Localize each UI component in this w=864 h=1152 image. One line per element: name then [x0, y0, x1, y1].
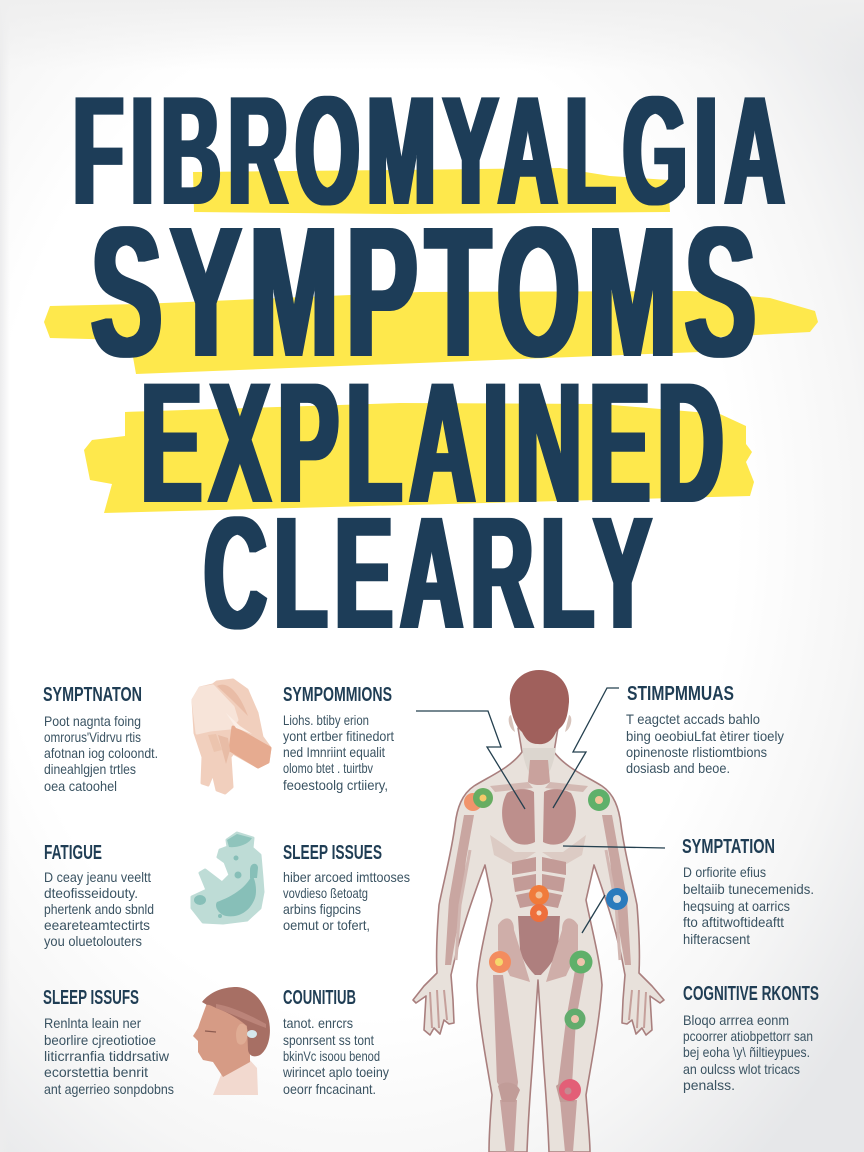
text block: cognitive rkonts — [683, 983, 819, 1093]
title — [73, 64, 792, 662]
body text: sponrsent ss tont — [283, 1033, 374, 1048]
body text: olomo btet . tuirtbv — [283, 761, 373, 776]
pain point: upper abdomen — [529, 885, 549, 905]
body text: penalss. — [683, 1078, 735, 1093]
chest muscles — [502, 789, 576, 845]
icon: teal curled figure — [192, 833, 263, 923]
body text — [626, 712, 784, 776]
body text: pcoorrer atiobpettorr san — [683, 1029, 813, 1044]
body text: you oluetolouters — [44, 934, 142, 949]
body text: Poot nagnta foing — [44, 714, 141, 729]
text block: symptom column 2 row 1 — [283, 684, 394, 793]
body text: Liohs. btiby erion — [283, 713, 369, 728]
body text: heqsuing at oarrics — [683, 899, 790, 914]
heading: STIMPMMUAS — [627, 683, 734, 705]
body text: D ceay jeanu veeltt — [44, 870, 151, 885]
body text: vovdieso ßetoatg — [283, 886, 368, 901]
hip bones — [498, 918, 578, 982]
body text: Renlnta leain ner — [44, 1016, 141, 1031]
heading: SYMPTNATON — [43, 684, 142, 706]
body text — [283, 870, 410, 933]
body text — [44, 1016, 174, 1097]
pain point: forearm — [606, 888, 628, 910]
text block: sleep issufs — [43, 987, 174, 1097]
body text: yont ertber fitinedort — [283, 729, 394, 744]
arm bones — [445, 815, 631, 965]
abdominal muscles — [512, 857, 566, 908]
heading: SYMPTATION — [682, 836, 775, 858]
pelvis — [518, 916, 560, 975]
body text: oemut or tofert, — [283, 918, 370, 933]
body text: omrorus'Vidrvu rtis — [44, 730, 141, 745]
body text: hifteracsent — [683, 932, 750, 947]
text block: symptation — [682, 836, 814, 947]
hand detail — [430, 990, 646, 1028]
body text: hiber arcoed imttooses — [283, 870, 410, 885]
body text: ned Imnriint equalit — [283, 745, 385, 760]
forearm muscle stripes — [456, 850, 620, 960]
body silhouette — [413, 728, 664, 1152]
body text: beorlire cjreotiotioe — [44, 1033, 156, 1048]
body text: liticrranfia tiddrsatiw — [44, 1049, 169, 1064]
body text — [283, 713, 394, 793]
body text: opinenoste rlistiomtbions — [626, 745, 767, 760]
callout lines — [416, 688, 665, 933]
body text: afotnan iog coloondt. — [44, 746, 158, 761]
body text: ant agerrieo sonpdobns — [44, 1082, 174, 1097]
pain point: right hip — [570, 950, 592, 974]
body text: T eagctet accads bahlo — [626, 712, 760, 727]
body text: an oulcss wlot tricacs — [683, 1062, 800, 1077]
hair — [510, 670, 569, 744]
body text: phertenk ando sbnld — [44, 902, 154, 917]
body text: bej eoha \y\ ñiltieypues. — [683, 1045, 810, 1060]
pain point: lower abdomen — [530, 904, 548, 922]
body text: bkinVc isoou benod — [283, 1049, 380, 1064]
heading: SYMPOMMIONS — [283, 684, 392, 706]
body text: D orfiorite efius — [683, 865, 766, 880]
text block: fatigue — [44, 842, 154, 949]
text block: symptom column 1 row 1 — [43, 684, 158, 794]
pain point: right shoulder — [588, 789, 610, 811]
body text: Bloqo arrrea eonm — [683, 1013, 789, 1028]
pain point: left hip — [489, 951, 511, 973]
neck — [522, 748, 556, 782]
text block: stimpmmuas — [626, 683, 784, 776]
collar bones — [490, 782, 588, 792]
leg bones — [493, 975, 518, 1152]
pain point: knee — [559, 1079, 581, 1101]
throat muscle — [528, 760, 550, 785]
icon: head profile — [193, 987, 270, 1095]
body text: feoestoolg crtiiery, — [283, 778, 388, 793]
body text: oea catoohel — [44, 779, 117, 794]
yellow highlighter strokes — [44, 168, 818, 513]
ears — [509, 715, 571, 732]
body text: beltaiib tunecemenids. — [683, 882, 814, 897]
body text: dosiasb and beoe. — [626, 761, 730, 776]
body text: arbins figpcins — [283, 902, 361, 917]
heading: SLEEP ISSUFS — [43, 987, 139, 1009]
body text — [44, 870, 154, 949]
pain point: thigh — [564, 1008, 586, 1030]
icon: peach hand — [193, 680, 270, 793]
heading: FATIGUE — [44, 842, 102, 864]
body text — [683, 865, 814, 947]
body text: oeorr fncacinant. — [283, 1082, 376, 1097]
knee joints — [498, 1083, 578, 1102]
heading: COUNITIUB — [283, 987, 356, 1009]
pain point: left shoulder — [464, 788, 493, 811]
body text: tanot. enrcrs — [283, 1016, 353, 1031]
heading: SLEEP ISSUES — [283, 842, 382, 864]
text block: sleep issues — [283, 842, 410, 933]
body text: eeareteamtectirts — [44, 918, 150, 933]
lower rib shading — [490, 835, 586, 866]
anatomical body figure — [413, 670, 664, 1152]
body text: dineahlgjen trtles — [44, 762, 136, 777]
body text: fto aftitwoftideaftt — [683, 915, 784, 930]
body text — [282, 1016, 389, 1097]
body text: bing oeobiuLfat ètirer tioely — [626, 729, 784, 744]
body text: wirincet aplo toeiny — [282, 1065, 389, 1080]
body text — [683, 1013, 813, 1093]
body text: ecorstettia benrit — [44, 1065, 148, 1080]
body text: dteofisseidouty. — [44, 886, 138, 901]
text block: cognitive — [282, 987, 389, 1097]
body text — [44, 714, 158, 794]
